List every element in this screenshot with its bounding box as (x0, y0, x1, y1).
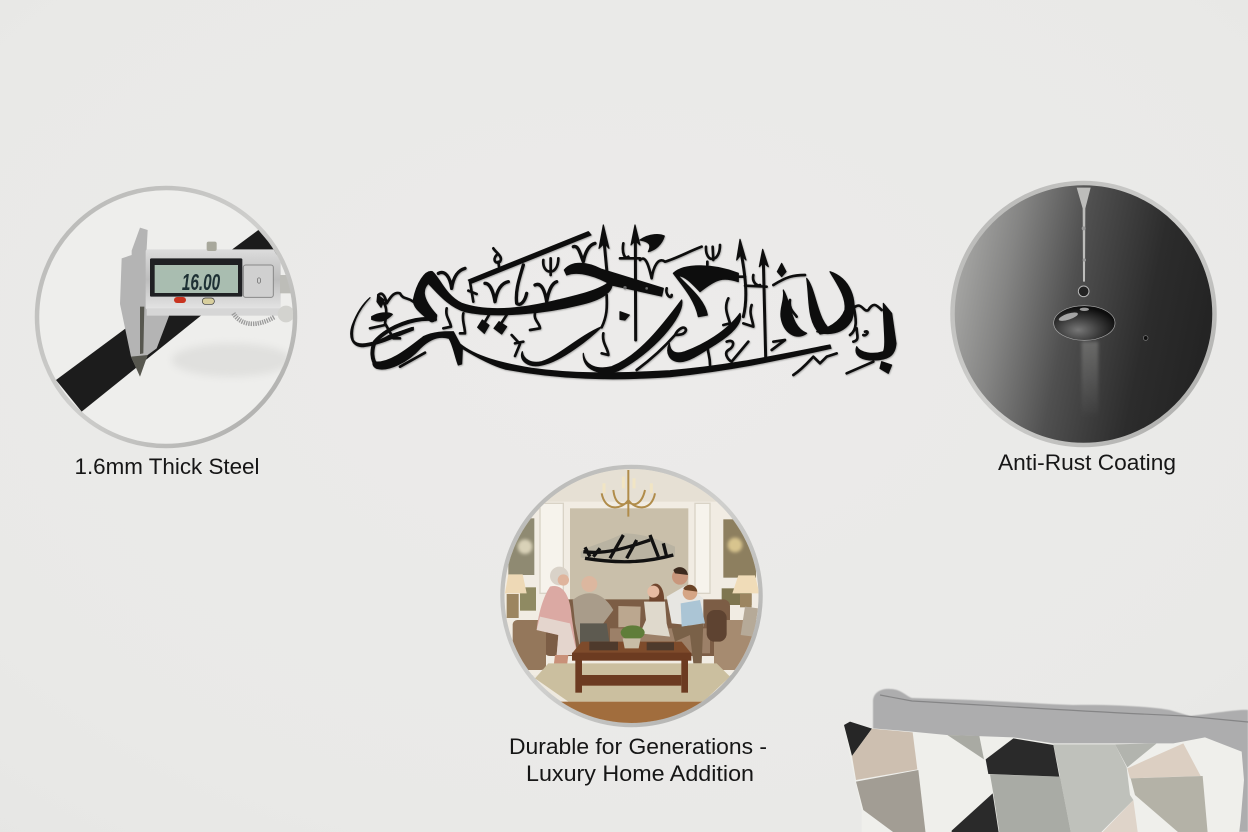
right half of the calligraphy (620, 225, 896, 375)
tiny droplet (1143, 336, 1148, 340)
thin strokes right (620, 233, 882, 375)
cushions in the corner (844, 689, 1248, 832)
caption: Luxury Home Addition (526, 761, 754, 786)
chandelier (602, 470, 655, 517)
books on table (589, 642, 618, 650)
steel strip (56, 230, 278, 412)
circle frame and dark metal (952, 183, 1214, 445)
panel: anti-rust coating (952, 183, 1214, 475)
water drop photo (1054, 188, 1148, 418)
grey back cushion (873, 689, 1248, 832)
final letter (856, 303, 896, 360)
second lower arc (521, 327, 602, 366)
mirrors (508, 518, 534, 575)
caption (509, 734, 767, 786)
boy (672, 585, 705, 663)
grandmother (537, 567, 577, 668)
left thin strokes (370, 233, 608, 367)
calligraphy wall art: Bismillah (351, 225, 896, 379)
leaf (372, 313, 392, 321)
grand letter form (673, 266, 738, 317)
caliper photo (56, 228, 294, 412)
long diagonal bar (468, 232, 591, 283)
wedge head with fixing points (564, 263, 663, 296)
rug and floor (535, 663, 730, 702)
caption: 1.6mm Thick Steel (74, 454, 260, 479)
Allah loops (817, 272, 854, 333)
geometric front cushion (844, 722, 1244, 832)
beige panels (852, 729, 917, 780)
father (667, 567, 703, 627)
caption: Durable for Generations - (509, 734, 767, 759)
caliper photo: 0 (257, 276, 262, 285)
lamps (505, 574, 527, 593)
fixing points (623, 286, 627, 289)
falling water (1077, 188, 1091, 282)
caliper body (146, 249, 281, 309)
miniature wall art (581, 533, 675, 562)
control pills (174, 297, 186, 303)
LCD screen (150, 258, 242, 297)
caliper jaws (120, 228, 170, 377)
living room photo (504, 469, 758, 723)
cushions (618, 606, 641, 627)
chain and knob (233, 313, 275, 324)
grey panels (947, 735, 984, 759)
arc under arrow (668, 313, 741, 362)
circle frame (502, 467, 760, 725)
circle frame and white photo base (37, 188, 295, 446)
dark corner (844, 722, 872, 756)
grandfather (573, 576, 613, 648)
ceiling and walls (546, 469, 716, 502)
long lower sweep (373, 332, 831, 379)
caption: Anti-Rust Coating (998, 450, 1176, 475)
sofas (543, 599, 730, 656)
caliper reading: 16.00 (182, 269, 220, 295)
main swoosh (413, 272, 612, 322)
coffee table (572, 642, 691, 693)
girl (640, 584, 670, 637)
zero button (243, 265, 273, 297)
water bead (1054, 306, 1115, 340)
table plant (621, 625, 645, 640)
panel: thick steel (37, 188, 295, 479)
panel: durable living room (490, 460, 775, 786)
leaf and dots (620, 225, 892, 373)
diamonds and arrowhead (377, 225, 609, 334)
black panels (986, 738, 1059, 777)
left hook (351, 298, 413, 347)
wide lower arc (583, 300, 682, 373)
